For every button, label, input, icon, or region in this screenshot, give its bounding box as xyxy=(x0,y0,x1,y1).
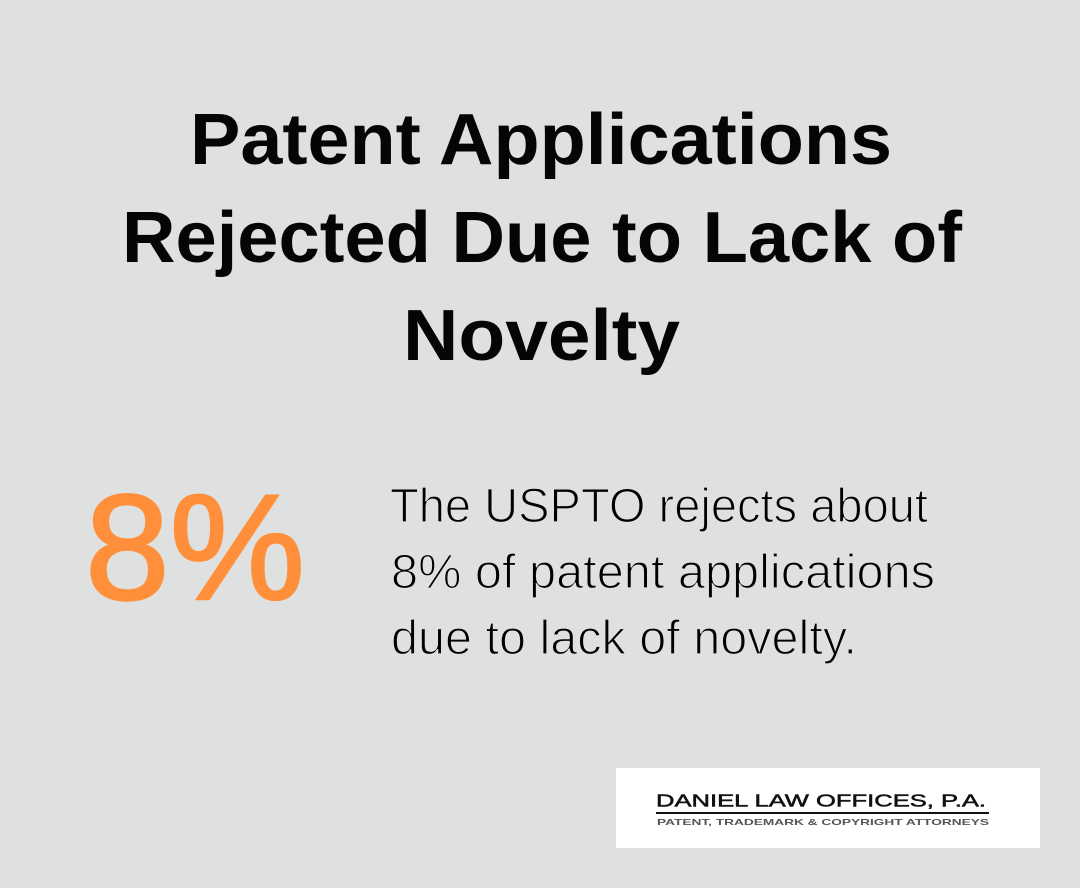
description text xyxy=(390,480,935,665)
title xyxy=(122,100,963,376)
logo: Daniel Law Offices: DANIEL LAW OFFICES, P.A. xyxy=(656,790,986,810)
title: Novelty xyxy=(403,296,680,376)
description text: The USPTO rejects about xyxy=(390,480,928,533)
logo: Daniel Law Offices xyxy=(616,768,1040,848)
title: Rejected Due to Lack of xyxy=(122,198,963,278)
big statistic: 8%: 8% xyxy=(85,463,305,631)
title: Patent Applications xyxy=(190,100,892,180)
description text: 8% of patent applications xyxy=(391,546,935,599)
description text: due to lack of novelty. xyxy=(391,612,857,665)
logo: Daniel Law Offices: PATENT, TRADEMARK & COPYRIGHT ATTORNEYS xyxy=(657,817,990,827)
